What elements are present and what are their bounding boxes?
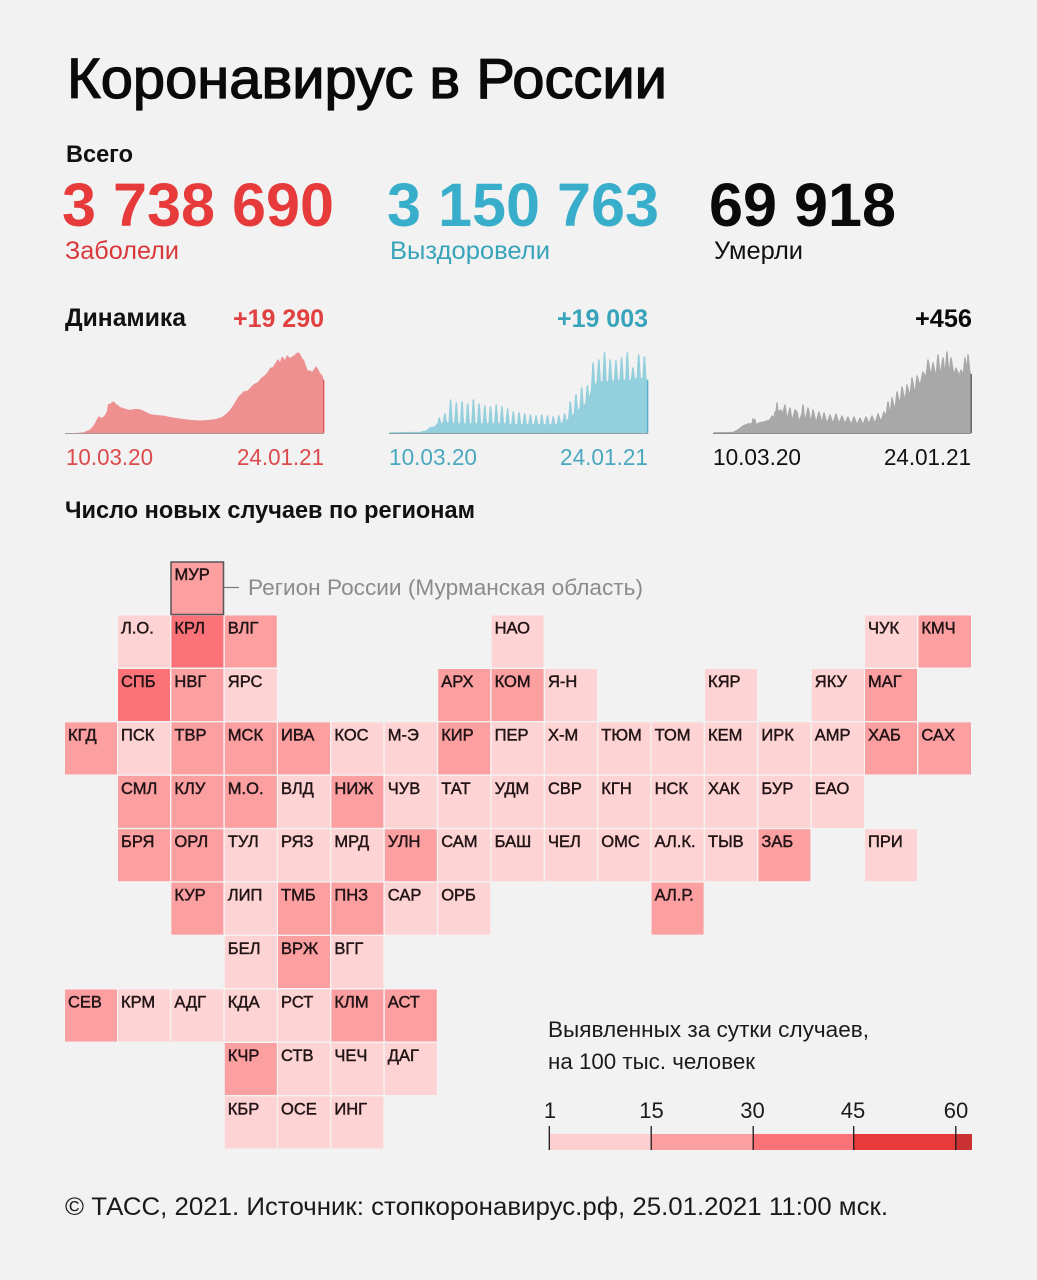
legend colour scale: 15: [639, 1098, 664, 1123]
region tile: СМЛ: [118, 776, 170, 828]
region tile: ВГГ: [331, 936, 383, 988]
region tile: КБР: [225, 1096, 277, 1148]
region tile: НИЖ: [331, 776, 383, 828]
region tile: МУР: [171, 562, 224, 614]
region tile: АМР: [812, 722, 864, 774]
stat: recovered: Выздоровели: [390, 237, 550, 265]
region tile: АЛ.Р.: АЛ.Р.: [655, 887, 694, 905]
region tile: АЛ.Р.: [652, 883, 704, 935]
region tile: КРЛ: [171, 616, 223, 668]
region tile: ВРЖ: ВРЖ: [281, 940, 319, 958]
region tile: КИР: [438, 722, 490, 774]
region tile: РСТ: РСТ: [281, 994, 313, 1012]
region tile: КРМ: [118, 990, 170, 1042]
region tile: БАШ: [492, 829, 544, 881]
callout: region example: Регион России (Мурманская область): [248, 575, 643, 600]
chart: infected dynamics: +19 290: [233, 305, 324, 333]
region tile: НАО: [492, 616, 544, 668]
region tile: АДГ: АДГ: [174, 994, 206, 1012]
region tile: ИНГ: [331, 1096, 383, 1148]
region tile: КЧР: КЧР: [228, 1047, 259, 1065]
region tile: ТУЛ: [225, 829, 277, 881]
region tile: ВГГ: ВГГ: [334, 940, 363, 958]
region tile: ВЛГ: ВЛГ: [228, 620, 258, 638]
chart: infected dynamics: 10.03.20: [66, 444, 153, 470]
region tile: ХАБ: [865, 722, 917, 774]
region tile: ТОМ: [652, 722, 704, 774]
region tile: ПНЗ: [331, 883, 383, 935]
region tile: ОРЛ: ОРЛ: [174, 833, 208, 851]
region tile: ИВА: [278, 722, 330, 774]
region tile: М-Э: М-Э: [388, 726, 419, 744]
region tile: НСК: НСК: [655, 780, 688, 798]
region tile: УЛН: [385, 829, 437, 881]
region tile: РЯЗ: РЯЗ: [281, 833, 314, 851]
region tile: М.О.: [225, 776, 277, 828]
chart: recovered dynamics: [389, 305, 648, 470]
region tile: КЕМ: КЕМ: [708, 726, 742, 744]
chart: recovered dynamics: +19 003: [557, 305, 648, 333]
region tile: СВР: СВР: [548, 780, 582, 798]
region tile: Х-М: [545, 722, 597, 774]
legend colour scale: [544, 1098, 972, 1150]
chart: infected dynamics: [65, 305, 324, 470]
region tile: КОС: [331, 722, 383, 774]
stat: deaths: 69 918: [709, 171, 896, 239]
region tile: ДАГ: ДАГ: [388, 1047, 419, 1065]
region tile: САР: [385, 883, 437, 935]
region tile: АМР: АМР: [815, 726, 851, 744]
chart: deaths dynamics: +456: [915, 305, 972, 333]
chart: recovered dynamics: 24.01.21: [560, 444, 648, 470]
heading: map: Число новых случаев по регионам: [65, 497, 475, 524]
region tile: Л.О.: Л.О.: [121, 620, 154, 638]
region tile: М-Э: [385, 722, 437, 774]
region tile: ДАГ: [385, 1043, 437, 1095]
region tile: ЗАБ: [758, 829, 810, 881]
region tile: КОМ: [492, 669, 544, 721]
region tile: МСК: МСК: [228, 726, 263, 744]
region tile: ХАК: [705, 776, 757, 828]
region tile: ОМС: [598, 829, 650, 881]
region tile: КЛМ: [331, 990, 383, 1042]
legend colour scale: 60: [944, 1098, 968, 1123]
region tile: ХАБ: ХАБ: [868, 726, 901, 744]
region tile: СЕВ: СЕВ: [68, 994, 102, 1012]
chart: deaths dynamics: 24.01.21: [884, 444, 971, 470]
region tile: МАГ: МАГ: [868, 673, 902, 691]
region tile: КГН: КГН: [601, 780, 632, 798]
region tile: САМ: [438, 829, 490, 881]
region tile: КЧР: [225, 1043, 277, 1095]
region tile: МРД: [331, 829, 383, 881]
region tile: ТЫВ: ТЫВ: [708, 833, 744, 851]
region tile: ТМБ: ТМБ: [281, 887, 316, 905]
legend colour scale: 1: [544, 1098, 556, 1123]
region tile: СПБ: [118, 669, 170, 721]
region tile: КДА: [225, 990, 277, 1042]
heading: totals: Всего: [66, 141, 133, 168]
region tile: БАШ: БАШ: [495, 833, 531, 851]
region tile: КЕМ: [705, 722, 757, 774]
region tile: СВР: [545, 776, 597, 828]
region tile: ИРК: ИРК: [761, 726, 794, 744]
legend title: на 100 тыс. человек: [548, 1049, 755, 1074]
footer: source: © ТАСС, 2021. Источник: стопкоронавирус.рф, 25.01.2021 11:00 мск.: [65, 1193, 888, 1221]
chart: deaths dynamics: 10.03.20: [713, 444, 801, 470]
region tile: СЕВ: [65, 990, 117, 1042]
region tile: ВЛГ: [225, 616, 277, 668]
region tile: ТЫВ: [705, 829, 757, 881]
region tile: КГН: [598, 776, 650, 828]
legend title: Выявленных за сутки случаев,: [548, 1017, 869, 1042]
region tile: Я-Н: [545, 669, 597, 721]
region tile: КУР: КУР: [174, 887, 206, 905]
region tile: САХ: [918, 722, 971, 774]
region tile: ПСК: [118, 722, 170, 774]
legend colour scale: 45: [841, 1098, 865, 1123]
region tile: ТАТ: ТАТ: [441, 780, 471, 798]
region tile: АЛ.К.: [652, 829, 704, 881]
region tile: ЯРС: ЯРС: [228, 673, 263, 691]
region tile: ЛИП: ЛИП: [228, 887, 262, 905]
region tile: МРД: МРД: [334, 833, 369, 851]
region tile: НВГ: [171, 669, 223, 721]
region tile: ТЮМ: ТЮМ: [601, 726, 642, 744]
region tile: УДМ: УДМ: [495, 780, 529, 798]
stat: deaths: Умерли: [714, 237, 803, 265]
region tile: РЯЗ: [278, 829, 330, 881]
region tile: КБР: КБР: [228, 1100, 259, 1118]
region tile: КГД: КГД: [68, 726, 97, 744]
region tile: БРЯ: БРЯ: [121, 833, 154, 851]
region tile: ХАК: ХАК: [708, 780, 740, 798]
region tile: АРХ: [438, 669, 490, 721]
region tile: АСТ: [385, 990, 437, 1042]
region tile: Я-Н: Я-Н: [548, 673, 577, 691]
region tile: БУР: [758, 776, 810, 828]
chart: deaths dynamics: [713, 305, 972, 470]
region tile: САМ: САМ: [441, 833, 478, 851]
region tile: ПСК: ПСК: [121, 726, 155, 744]
region tile: КУР: [171, 883, 223, 935]
region tile: ЗАБ: ЗАБ: [761, 833, 793, 851]
stat: recovered: 3 150 763: [387, 171, 659, 239]
region tile: АЛ.К.: АЛ.К.: [655, 833, 696, 851]
title: Коронавирус в России: [67, 47, 667, 111]
region tile: МСК: [225, 722, 277, 774]
region tile: БЕЛ: БЕЛ: [228, 940, 260, 958]
region tile: АРХ: АРХ: [441, 673, 473, 691]
legend colour scale: 30: [740, 1098, 765, 1123]
region tile: ТОМ: ТОМ: [655, 726, 691, 744]
stat: infected: Заболели: [65, 237, 179, 265]
region tile: КГД: [65, 722, 117, 774]
region tile: ЧУВ: [385, 776, 437, 828]
region tile: ОРЛ: [171, 829, 223, 881]
region tile: ЧЕЛ: [545, 829, 597, 881]
region tile: ИНГ: ИНГ: [334, 1100, 367, 1118]
region tile: НСК: [652, 776, 704, 828]
region tile: ЕАО: [812, 776, 864, 828]
region tile: КМЧ: КМЧ: [921, 620, 956, 638]
region tile: ТМБ: [278, 883, 330, 935]
region tile: ИВА: ИВА: [281, 726, 314, 744]
region tile: КЛМ: КЛМ: [334, 994, 369, 1012]
chart: infected dynamics: 24.01.21: [237, 444, 324, 470]
region tile: ОСЕ: [278, 1096, 330, 1148]
region tile: ПРИ: ПРИ: [868, 833, 903, 851]
region tile: ТУЛ: ТУЛ: [228, 833, 259, 851]
region tile: НВГ: НВГ: [174, 673, 206, 691]
region tile: ЧЕЧ: ЧЕЧ: [334, 1047, 367, 1065]
region tile: ЯКУ: ЯКУ: [815, 673, 848, 691]
region tile: ЧЕЛ: ЧЕЛ: [548, 833, 581, 851]
region tile: М.О.: М.О.: [228, 780, 264, 798]
region tile: МАГ: [865, 669, 917, 721]
region tile: КИР: КИР: [441, 726, 474, 744]
region tile: ТАТ: [438, 776, 490, 828]
region tile: ЧУК: [865, 616, 917, 668]
region tile: УЛН: УЛН: [388, 833, 420, 851]
region tile: ЯКУ: [812, 669, 864, 721]
region tile: ПЕР: ПЕР: [495, 726, 528, 744]
region tile: ОМС: ОМС: [601, 833, 640, 851]
region tile: ТВР: ТВР: [174, 726, 206, 744]
region tile: ОРБ: [438, 883, 490, 935]
region tile: ВЛД: ВЛД: [281, 780, 314, 798]
region tile: ИРК: [758, 722, 810, 774]
region tile: КДА: КДА: [228, 994, 260, 1012]
region tile: КОМ: КОМ: [495, 673, 531, 691]
region tile: ПРИ: [865, 829, 917, 881]
region tile: БУР: БУР: [761, 780, 793, 798]
region tile: ОРБ: ОРБ: [441, 887, 476, 905]
region tile: Л.О.: [118, 616, 170, 668]
region tile: КРЛ: КРЛ: [174, 620, 205, 638]
region tile: ЛИП: [225, 883, 277, 935]
region tile: ПЕР: [492, 722, 544, 774]
region tile: НАО: НАО: [495, 620, 530, 638]
region tile: ТЮМ: [598, 722, 650, 774]
region tile: НИЖ: НИЖ: [334, 780, 374, 798]
region tile: КРМ: КРМ: [121, 994, 155, 1012]
region tile: ПНЗ: ПНЗ: [334, 887, 368, 905]
region tile: КЯР: [705, 669, 757, 721]
region tile: КЛУ: КЛУ: [174, 780, 206, 798]
region tile: КЛУ: [171, 776, 223, 828]
region tile: СТВ: [278, 1043, 330, 1095]
stat: infected: 3 738 690: [62, 171, 334, 239]
region tile: ЧУК: ЧУК: [868, 620, 899, 638]
region tile: ЕАО: ЕАО: [815, 780, 849, 798]
region tile: РСТ: [278, 990, 330, 1042]
region tile: САХ: САХ: [921, 726, 955, 744]
region tile: ЯРС: [225, 669, 277, 721]
region tile: КОС: КОС: [334, 726, 369, 744]
region tile: АСТ: АСТ: [388, 994, 420, 1012]
legend title: [548, 1017, 869, 1074]
region tile: УДМ: [492, 776, 544, 828]
region tile: СТВ: СТВ: [281, 1047, 313, 1065]
region tile: ВРЖ: [278, 936, 330, 988]
region tile: КМЧ: [918, 616, 971, 668]
region tile: АДГ: [171, 990, 223, 1042]
region tile: САР: САР: [388, 887, 421, 905]
region tile: ТВР: [171, 722, 223, 774]
region tile: БРЯ: [118, 829, 170, 881]
region tile: Х-М: Х-М: [548, 726, 578, 744]
region tile: ЧУВ: ЧУВ: [388, 780, 420, 798]
region tile: ВЛД: [278, 776, 330, 828]
region tile: МУР: МУР: [174, 566, 210, 584]
region tile: ЧЕЧ: [331, 1043, 383, 1095]
heading: dynamics: Динамика: [65, 304, 187, 332]
chart: recovered dynamics: 10.03.20: [389, 444, 477, 470]
region tile: ОСЕ: ОСЕ: [281, 1100, 317, 1118]
region tile: СМЛ: СМЛ: [121, 780, 157, 798]
region tile: КЯР: КЯР: [708, 673, 741, 691]
tile map of regions: [65, 562, 971, 1148]
region tile: БЕЛ: [225, 936, 277, 988]
region tile: СПБ: СПБ: [121, 673, 156, 691]
